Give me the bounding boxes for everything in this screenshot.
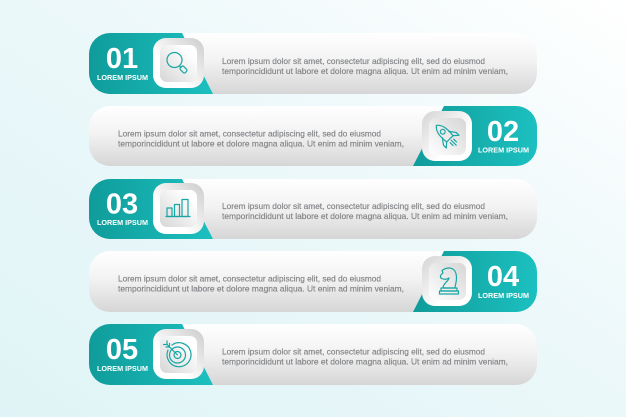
- description 01: temporincididunt ut labore et dolore magna aliqua. Ut enim ad minim veniam,: [222, 66, 508, 76]
- panel base 02: [89, 106, 537, 166]
- panel base 01: [89, 33, 537, 94]
- number 02: 02: [487, 116, 519, 148]
- description 02: Lorem ipsum dolor sit amet, consectetur adipiscing elit, sed do eiusmod: [118, 128, 381, 138]
- panel base 04: [89, 251, 537, 312]
- panel: step 02: [89, 106, 537, 166]
- panel: step 03: [89, 179, 537, 239]
- panel: step 04: [89, 251, 537, 312]
- description 01: [222, 56, 508, 76]
- description 04: temporincididunt ut labore et dolore magna aliqua. Ut enim ad minim veniam,: [118, 284, 404, 294]
- description 05: temporincididunt ut labore et dolore magna aliqua. Ut enim ad minim veniam,: [222, 356, 508, 366]
- panel base 03: [89, 179, 537, 239]
- number 03: 03: [106, 188, 138, 220]
- icon tile 03: [153, 183, 204, 234]
- description 01: Lorem ipsum dolor sit amet, consectetur adipiscing elit, sed do eiusmod: [222, 56, 485, 66]
- icon: rocket: [430, 119, 463, 152]
- description 04: [118, 274, 404, 294]
- panel: step 01: [89, 33, 537, 94]
- teal label shape 02: [413, 106, 537, 166]
- panel base 05: [89, 324, 537, 385]
- description 03: Lorem ipsum dolor sit amet, consectetur adipiscing elit, sed do eiusmod: [222, 201, 485, 211]
- label 01: LOREM IPSUM: [97, 73, 148, 82]
- icon: magnifier: [167, 52, 188, 74]
- panel: step 05: [89, 324, 537, 385]
- description 03: temporincididunt ut labore et dolore magna aliqua. Ut enim ad minim veniam,: [222, 211, 508, 221]
- label 02: LOREM IPSUM: [478, 146, 529, 154]
- teal label shape 03: [89, 179, 213, 239]
- number 04: 04: [487, 261, 519, 293]
- label 04: LOREM IPSUM: [478, 291, 529, 300]
- icon tile 04: [422, 256, 472, 306]
- icon: target with arrow: [164, 341, 191, 367]
- icon tile 05: [153, 329, 204, 379]
- label 05: LOREM IPSUM: [97, 364, 148, 373]
- teal label shape 01: [89, 33, 213, 94]
- icon: bar chart: [166, 200, 190, 216]
- number 05: 05: [106, 334, 138, 366]
- teal label shape 04: [413, 251, 537, 312]
- icon tile 02: [422, 111, 472, 161]
- description 04: Lorem ipsum dolor sit amet, consectetur adipiscing elit, sed do eiusmod: [118, 274, 381, 284]
- description 05: [222, 346, 508, 366]
- description 03: [222, 201, 508, 221]
- description 02: temporincididunt ut labore et dolore magna aliqua. Ut enim ad minim veniam,: [118, 138, 404, 148]
- icon tile 01: [153, 38, 204, 88]
- description 05: Lorem ipsum dolor sit amet, consectetur adipiscing elit, sed do eiusmod: [222, 346, 485, 356]
- teal label shape 05: [89, 324, 213, 385]
- label 03: LOREM IPSUM: [97, 218, 148, 227]
- description 02: [118, 128, 404, 148]
- icon: chess knight: [440, 268, 458, 294]
- number 01: 01: [106, 43, 138, 75]
